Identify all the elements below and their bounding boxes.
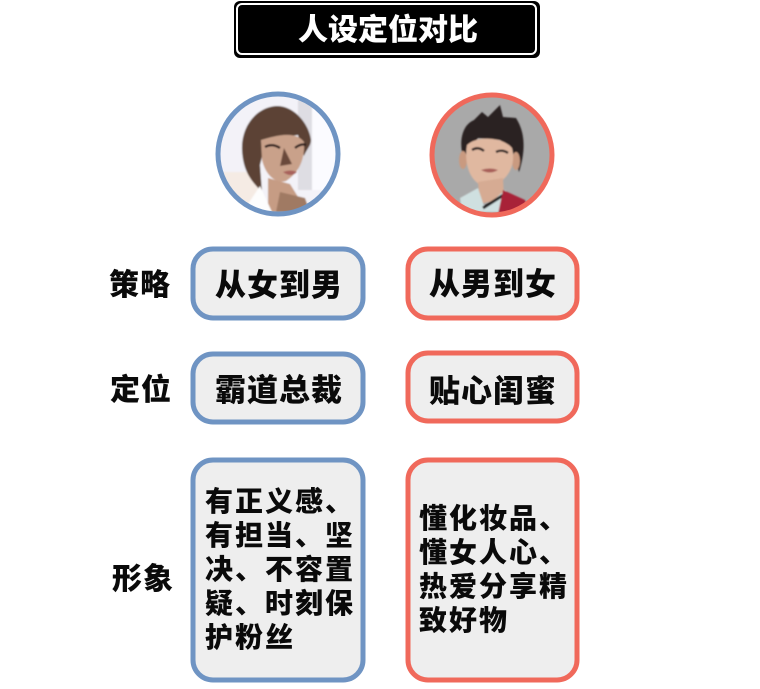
portrait: woman — [218, 94, 338, 214]
image box: red: 热爱分享精 — [419, 570, 569, 602]
title — [234, 1, 540, 58]
image box: blue: 有正义感、 — [205, 485, 355, 517]
portrait: man — [432, 95, 552, 215]
image box: blue: 护粉丝 — [205, 622, 295, 653]
strategy box: red: 从男到女 — [429, 267, 557, 302]
positioning box: red — [408, 353, 577, 421]
image box: red: 懂女人心、 — [419, 537, 569, 568]
image box: blue: 决、不容置 — [205, 553, 355, 585]
label: image: 形象 — [112, 563, 174, 596]
positioning box: blue — [193, 354, 363, 422]
strategy box: blue — [193, 249, 363, 318]
label: strategy: 策略 — [109, 268, 171, 302]
positioning box: blue: 霸道总裁 — [215, 373, 343, 408]
positioning box: red: 贴心闺蜜 — [429, 374, 557, 409]
image box: blue: 有担当、坚 — [205, 520, 355, 551]
image box: blue — [193, 460, 363, 680]
title: 人设定位对比 — [298, 13, 478, 47]
image box: blue: 疑、时刻保 — [205, 587, 355, 619]
strategy box: blue: 从女到男 — [215, 268, 343, 303]
image box: red: 懂化妆品、 — [419, 503, 569, 534]
strategy box: red — [408, 249, 577, 318]
image box: red — [408, 460, 577, 680]
image box: red: 致好物 — [419, 605, 509, 636]
label: positioning: 定位 — [110, 373, 172, 407]
